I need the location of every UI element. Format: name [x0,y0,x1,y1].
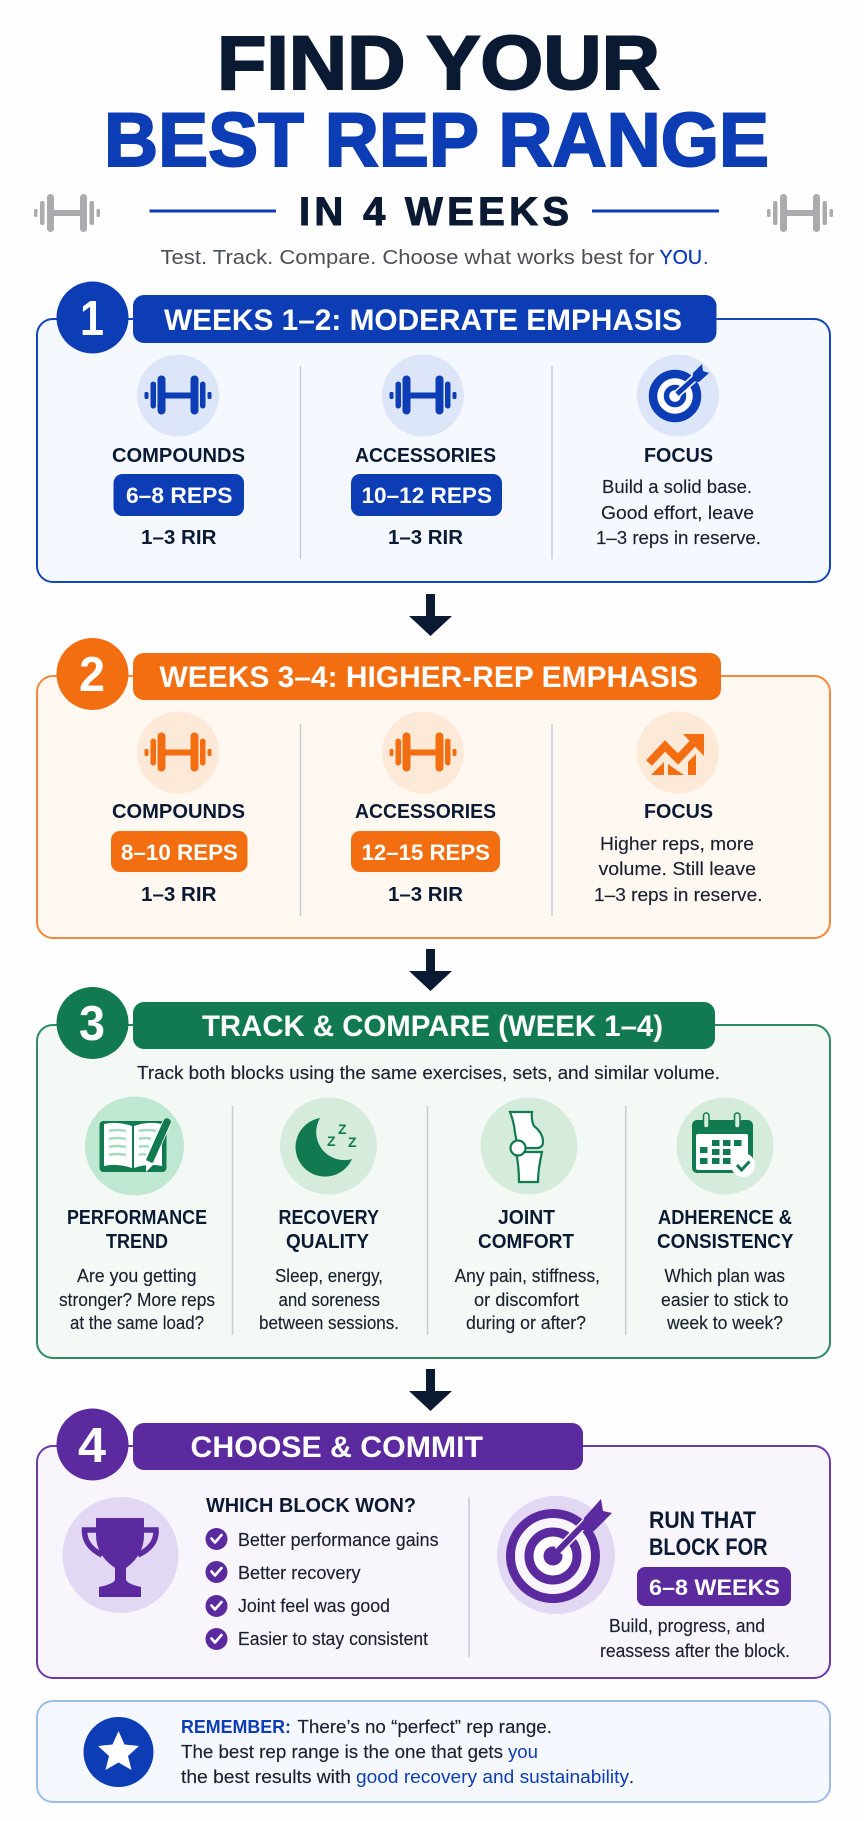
duration pill [637,1567,791,1606]
panel: track and compare [37,987,830,1358]
checklist heading: WHICH BLOCK WON? [206,1495,416,1517]
checklist: which block won [206,1495,438,1650]
description: volume. Still leave [598,859,756,879]
description: between sessions. [259,1313,399,1333]
description: and soreness [278,1290,380,1310]
number badge 2 [56,638,128,710]
subtitle: in 4 weeks: IN 4 WEEKS [299,190,569,234]
label: ACCESSORIES [355,445,496,467]
left rule [150,210,276,212]
description: 1–3 reps in reserve. [594,885,762,905]
heading: COMFORT [478,1231,574,1253]
callout heading: BLOCK FOR [649,1534,768,1561]
column: accessories [351,354,502,549]
reps pill [114,474,244,516]
heading [657,1207,794,1253]
reps pill [351,831,500,872]
heading: ADHERENCE & [658,1207,792,1229]
number badge 3: 3 [79,997,105,1051]
description [59,1266,215,1333]
note text: the best results with [181,1767,351,1787]
number badge 3 [56,987,128,1059]
description: stronger? More reps [59,1290,215,1310]
panel: weeks 1-2 moderate emphasis [37,282,830,582]
label: FOCUS [644,801,713,823]
heading [67,1207,207,1253]
column: joint comfort [455,1098,600,1333]
panel: remember note [37,1701,830,1802]
description: at the same load? [70,1313,204,1333]
description: Higher reps, more [600,834,754,854]
icon: star badge [84,1717,154,1787]
header bar: TRACK & COMPARE (WEEK 1–4) [202,1010,663,1043]
icon: calendar with check [676,1098,774,1194]
number badge 1: 1 [80,292,104,346]
note text: you [508,1742,538,1762]
header bar [133,1002,715,1049]
description: during or after? [466,1313,586,1333]
reps pill: 12–15 REPS [362,840,490,865]
label: COMPOUNDS [112,801,245,823]
panel background [37,1701,830,1802]
heading [478,1207,574,1253]
header bar: CHOOSE & COMMIT [190,1431,483,1464]
icon: dumbbell [137,712,219,794]
column: performance trend [59,1096,215,1333]
note text: The best rep range is the one that gets [181,1742,503,1762]
icon: trophy [62,1497,178,1613]
description: Build a solid base. [602,477,752,497]
note text: There’s no “perfect” rep range. [297,1717,552,1737]
number badge 4 [56,1408,128,1480]
description: or discomfort [474,1290,579,1310]
arrow 2 [409,949,452,991]
rir: 1–3 RIR [141,884,217,906]
description: week to week? [666,1313,783,1333]
header bar [133,295,716,343]
tagline: YOU [660,247,702,269]
right rule [592,210,719,212]
icon: moon and zzz: Z [327,1133,336,1149]
icon: moon and zzz [280,1098,377,1194]
description [661,1266,788,1333]
rir: 1–3 RIR [388,884,464,906]
heading: JOINT [498,1207,555,1229]
rir: 1–3 RIR [388,527,464,549]
header bar: WEEKS 1–2: MODERATE EMPHASIS [164,304,682,337]
panel background [37,676,830,938]
column: compounds [111,712,248,906]
label: COMPOUNDS [112,445,245,467]
reps pill [111,831,248,872]
arrow 1 [409,594,452,636]
label: FOCUS [644,445,713,467]
reps pill: 10–12 REPS [362,483,492,508]
tagline: . [703,247,709,269]
heading: CONSISTENCY [657,1231,794,1253]
number badge 2: 2 [79,648,105,702]
description [594,834,762,905]
note text [181,1716,634,1787]
panel background [37,319,830,582]
icon: rising chart [637,712,719,794]
title line 2: BEST REP RANGE [104,98,769,183]
description: reassess after the block. [600,1641,790,1661]
column: accessories [351,712,500,906]
callout heading: RUN THAT [649,1507,756,1534]
item: joint feel: Joint feel was good [238,1596,390,1616]
title block [34,21,833,269]
header bar [133,1423,583,1470]
description: Which plan was [664,1266,785,1286]
tagline: Test. Track. Compare. Choose what works best for [160,247,655,269]
icon: left gray dumbbell [34,194,100,232]
reps pill: 8–10 REPS [121,840,238,865]
heading: QUALITY [286,1231,370,1253]
rir: 1–3 RIR [141,527,217,549]
icon: right gray dumbbell [767,194,833,232]
callout heading [649,1507,768,1561]
icon: purple target [497,1496,615,1614]
item: recovery: Better recovery [238,1563,360,1583]
heading: TREND [106,1231,168,1253]
item: consistency: Easier to stay consistent [238,1629,428,1649]
reps pill: 6–8 REPS [126,483,232,508]
header bar [133,653,721,700]
description [600,1616,790,1661]
icon: book and pen [85,1096,184,1196]
column: adherence and consistency [657,1098,794,1333]
item: performance: Better performance gains [238,1530,438,1550]
number badge 1 [56,282,128,354]
icon: target [637,354,719,436]
header bar: WEEKS 3–4: HIGHER-REP EMPHASIS [160,661,698,694]
heading [278,1207,380,1253]
description: 1–3 reps in reserve. [596,528,761,548]
intro text: Track both blocks using the same exercises, sets, and similar volume. [137,1063,720,1083]
panel: choose and commit [37,1408,830,1678]
description: easier to stick to [661,1290,788,1310]
column: recovery quality [259,1098,399,1333]
icon: moon and zzz: Z [348,1134,357,1150]
column: focus [596,354,761,548]
description: Build, progress, and [609,1616,765,1636]
column: focus [594,712,762,905]
description: Are you getting [77,1266,196,1286]
description [455,1266,600,1333]
number badge 4: 4 [78,1419,106,1473]
note text: good recovery and sustainability [356,1767,629,1787]
label: ACCESSORIES [355,801,496,823]
heading: PERFORMANCE [67,1207,207,1229]
reps pill [351,474,502,516]
panel background [37,1446,830,1678]
heading: RECOVERY [278,1207,380,1229]
duration pill: 6–8 WEEKS [649,1575,780,1600]
panel background [37,1025,830,1358]
panel: weeks 3-4 higher-rep emphasis [37,638,830,938]
description: Good effort, leave [601,503,754,523]
title line 1: FIND YOUR [217,21,660,106]
callout: run that block [600,1507,791,1661]
icon: dumbbell [137,354,219,436]
note text: REMEMBER: [181,1716,291,1737]
description: Any pain, stiffness, [455,1266,600,1286]
note text: . [629,1767,634,1787]
arrow 3 [409,1369,452,1411]
icon: dumbbell [382,712,464,794]
icon: knee joint [480,1098,578,1194]
icon: dumbbell [382,354,464,436]
description [259,1266,399,1333]
description: Sleep, energy, [275,1266,383,1286]
column: compounds [112,354,245,549]
description [596,477,761,548]
icon: moon and zzz: Z [338,1121,347,1137]
